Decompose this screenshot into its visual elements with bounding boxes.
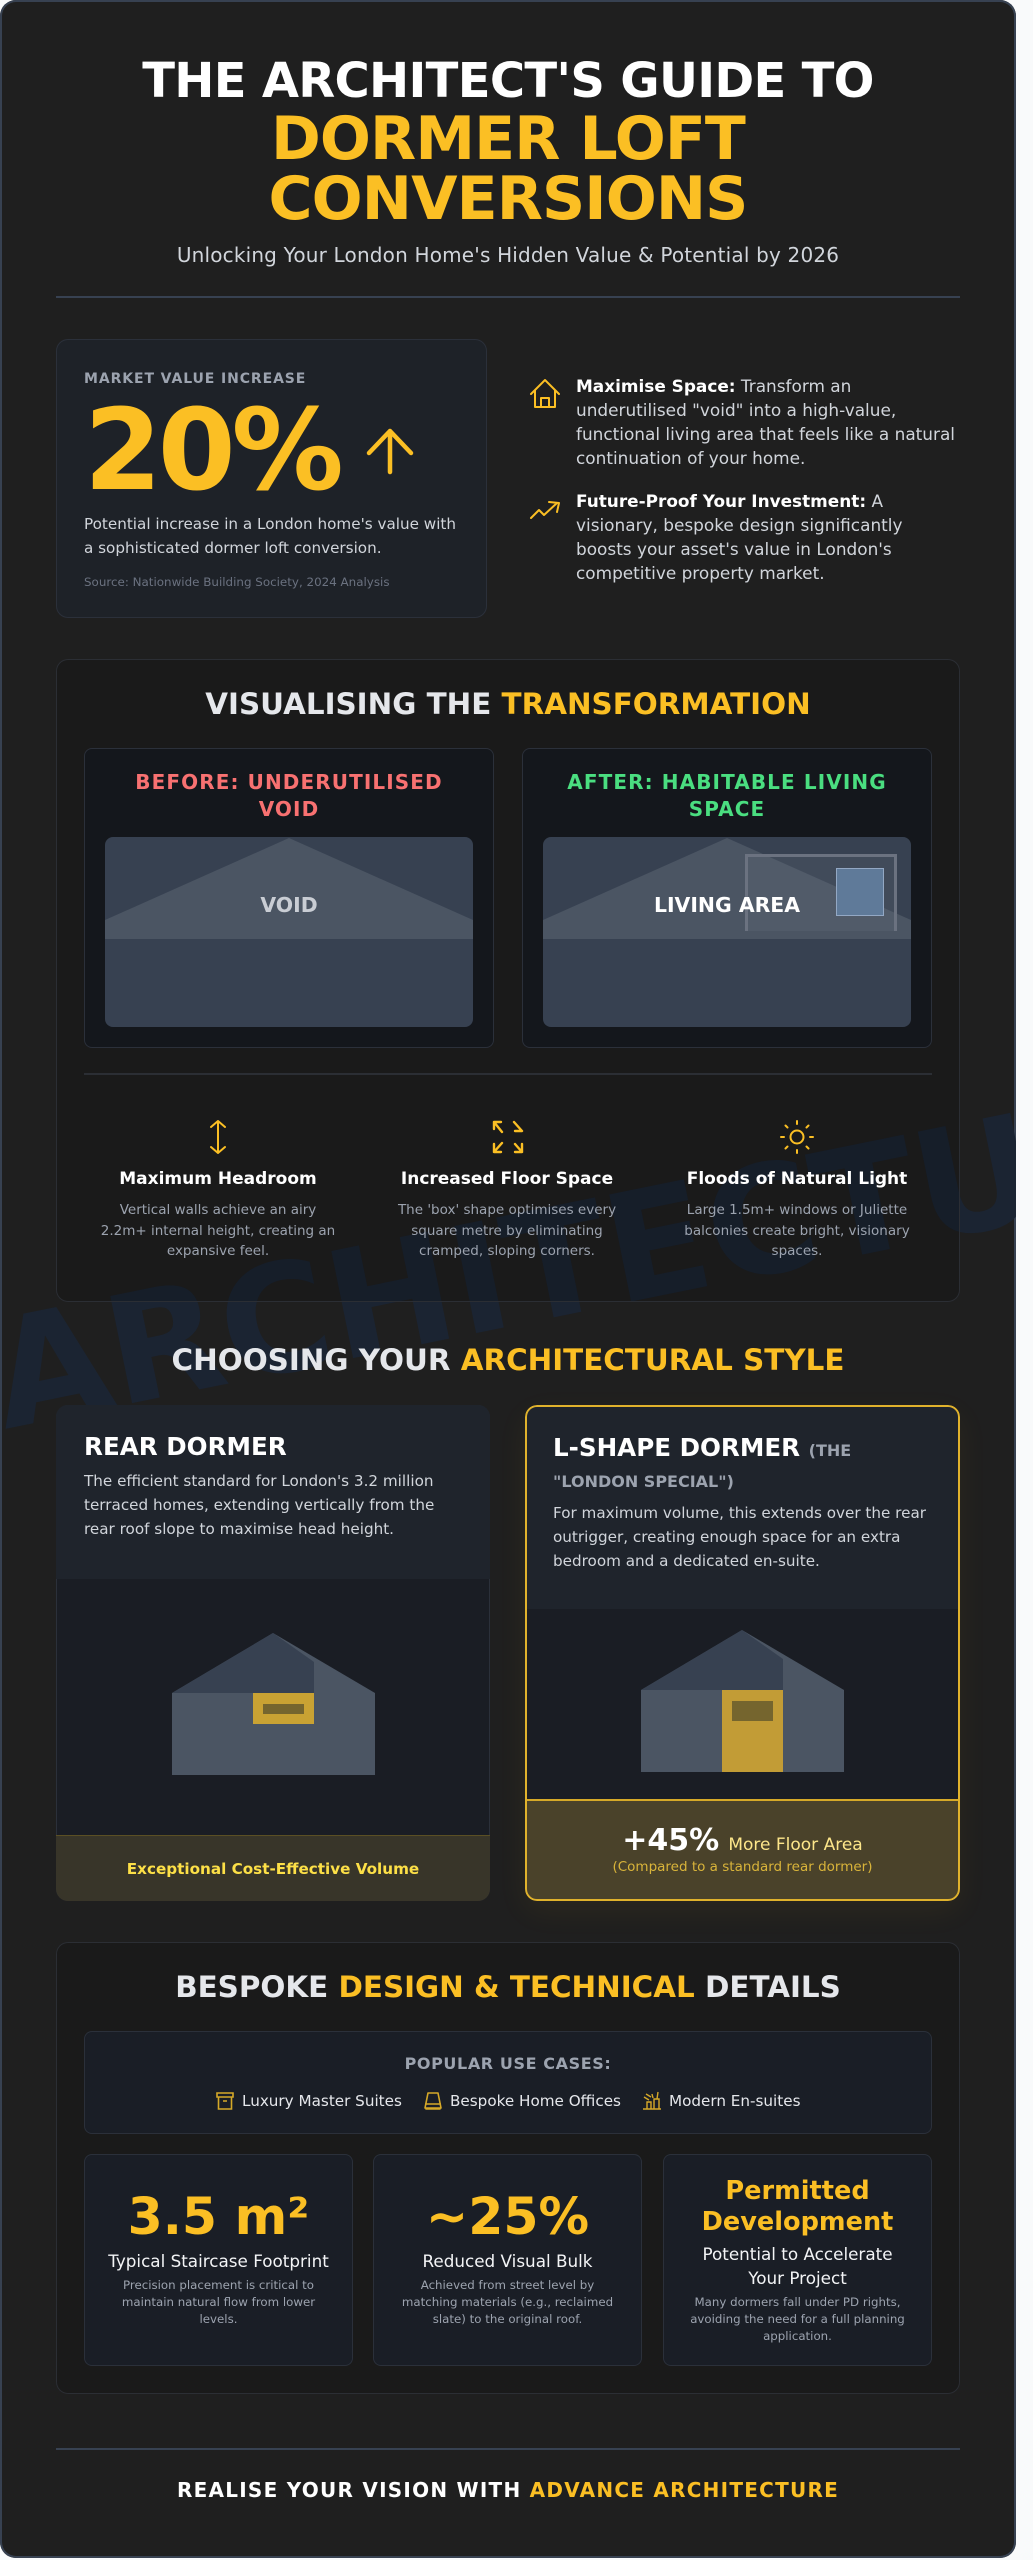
title: REAR DORMER xyxy=(84,1432,287,1461)
title: THE ARCHITECT'S GUIDE TO xyxy=(142,53,874,109)
text: outrigger, creating enough space for an extra xyxy=(553,1528,900,1546)
text xyxy=(84,1472,434,1538)
panel: popular use cases xyxy=(84,2031,932,2134)
stat value: 20% xyxy=(84,386,339,516)
benefit text: underutilised "void" into a high-value, xyxy=(576,400,896,420)
feature: headroom xyxy=(101,1120,335,1259)
title highlight xyxy=(269,104,747,234)
stat card: permitted development xyxy=(663,2154,932,2366)
title note: "LONDON SPECIAL") xyxy=(553,1472,734,1491)
description: Many dormers fall under PD rights, xyxy=(694,2295,900,2309)
panel: visualising the transformation xyxy=(56,659,960,1302)
text xyxy=(553,1504,926,1570)
label: Bespoke Home Offices xyxy=(450,2092,621,2110)
text: terraced homes, extending vertically from the xyxy=(84,1496,434,1514)
icon: house xyxy=(530,379,560,408)
panel: l-shape dormer xyxy=(525,1405,960,1901)
text: The efficient standard for London's 3.2 million xyxy=(84,1472,433,1490)
feature text: square metre by eliminating xyxy=(411,1222,603,1238)
title: L-SHAPE DORMER (THE xyxy=(553,1433,851,1462)
use cases heading: POPULAR USE CASES: xyxy=(405,2054,611,2073)
description: avoiding the need for a full planning xyxy=(690,2312,905,2326)
text: bedroom and a dedicated en-suite. xyxy=(553,1552,820,1570)
description: Precision placement is critical to xyxy=(123,2278,314,2292)
callout xyxy=(56,1835,490,1901)
benefit text: visionary, bespoke design significantly xyxy=(576,515,902,535)
stat source: Source: Nationwide Building Society, 2024 Analysis xyxy=(84,575,390,589)
feature text: cramped, sloping corners. xyxy=(419,1243,595,1259)
panel: after xyxy=(522,748,932,1048)
icon: sun xyxy=(780,1120,814,1154)
stat card: visual bulk xyxy=(373,2154,642,2366)
stat: +45% More Floor Area xyxy=(622,1823,863,1858)
stat description: Potential increase in a London home's value with xyxy=(84,515,456,533)
description: Achieved from street level by xyxy=(421,2278,594,2292)
value: Development xyxy=(702,2207,893,2237)
icon: trend arrow xyxy=(530,501,560,519)
label: Typical Staircase Footprint xyxy=(108,2251,329,2271)
after heading xyxy=(567,770,887,821)
benefit text xyxy=(576,376,955,468)
panel: rear dormer xyxy=(56,1405,490,1901)
feature text: 2.2m+ internal height, creating an xyxy=(101,1222,335,1238)
description block xyxy=(525,1405,960,1609)
before heading: VOID xyxy=(259,797,319,821)
benefit text: continuation of your home. xyxy=(576,448,805,468)
feature text: Vertical walls achieve an airy xyxy=(120,1202,316,1218)
feature text xyxy=(101,1202,335,1259)
text: rear roof slope to maximise head height. xyxy=(84,1520,394,1538)
benefit text: competitive property market. xyxy=(576,563,825,583)
description xyxy=(663,2294,932,2345)
note: (Compared to a standard rear dormer) xyxy=(612,1859,873,1875)
before heading xyxy=(135,770,443,821)
after heading: AFTER: HABITABLE LIVING xyxy=(567,770,887,794)
feature text: balconies create bright, visionary xyxy=(684,1222,910,1238)
panel: before xyxy=(84,748,494,1048)
panel: bespoke design and technical details xyxy=(56,1942,960,2394)
label: LIVING AREA xyxy=(654,893,800,917)
benefit text: Future-Proof Your Investment: A xyxy=(576,491,883,511)
feature text: The 'box' shape optimises every xyxy=(398,1202,616,1218)
feature: natural light xyxy=(684,1120,910,1259)
illustration: rear dormer house xyxy=(172,1633,375,1775)
feature text: Large 1.5m+ windows or Juliette xyxy=(687,1202,907,1218)
before heading: BEFORE: UNDERUTILISED xyxy=(135,770,443,794)
label: Luxury Master Suites xyxy=(242,2092,402,2110)
label: Potential to Accelerate xyxy=(702,2244,893,2264)
description xyxy=(122,2278,316,2326)
value: 3.5 m² xyxy=(128,2187,309,2246)
benefit text: Maximise Space: Transform an xyxy=(576,376,851,396)
stat label: MARKET VALUE INCREASE xyxy=(84,371,306,387)
icon: vertical arrows xyxy=(210,1120,226,1154)
section heading: architectural style: CHOOSING YOUR ARCHITECTURAL STYLE xyxy=(172,1343,844,1377)
description: maintain natural flow from lower xyxy=(122,2295,315,2309)
icon: archive box xyxy=(216,2092,234,2110)
feature text xyxy=(684,1202,910,1259)
title highlight: DORMER LOFT xyxy=(271,104,745,174)
icon: chair xyxy=(424,2092,442,2110)
icon: up arrow xyxy=(366,428,414,474)
callout: Exceptional Cost-Effective Volume xyxy=(127,1860,419,1878)
after heading: SPACE xyxy=(689,797,765,821)
value: ~25% xyxy=(426,2187,589,2246)
card highlight border xyxy=(525,1405,960,1901)
benefit text: functional living area that feels like a natural xyxy=(576,424,955,444)
dormer outline xyxy=(745,854,897,931)
benefit text: boosts your asset's value in London's xyxy=(576,539,892,559)
use case: modern en-suites xyxy=(643,2092,800,2110)
feature title: Floods of Natural Light xyxy=(687,1169,907,1189)
label: Reduced Visual Bulk xyxy=(422,2251,593,2271)
label: VOID xyxy=(260,893,318,917)
description block xyxy=(56,1405,490,1579)
feature: floor space xyxy=(398,1120,616,1259)
title highlight: CONVERSIONS xyxy=(269,164,747,234)
description: slate) to the original roof. xyxy=(433,2312,582,2326)
stat description: a sophisticated dormer loft conversion. xyxy=(84,539,382,557)
description xyxy=(402,2278,613,2326)
label: Modern En-suites xyxy=(669,2092,800,2110)
benefit text xyxy=(576,491,902,583)
feature text xyxy=(398,1202,616,1259)
benefit: future-proof xyxy=(530,491,902,583)
feature title: Maximum Headroom xyxy=(119,1169,317,1189)
icon: expand xyxy=(492,1120,524,1154)
illustration: living area xyxy=(543,837,911,1027)
illustration: void xyxy=(105,837,473,1027)
feature text: spaces. xyxy=(772,1243,822,1259)
footer: REALISE YOUR VISION WITH ADVANCE ARCHITECTURE xyxy=(177,2478,839,2502)
label xyxy=(702,2244,893,2288)
feature title: Increased Floor Space xyxy=(401,1169,613,1189)
window xyxy=(836,868,884,916)
panel: market value stat xyxy=(56,339,487,618)
benefit: maximise space xyxy=(530,376,955,468)
use case: bespoke home offices xyxy=(424,2092,621,2110)
value xyxy=(702,2176,893,2237)
header xyxy=(142,53,874,267)
stat card: staircase xyxy=(84,2154,353,2366)
heading: BESPOKE DESIGN & TECHNICAL DETAILS xyxy=(175,1970,841,2004)
label: Your Project xyxy=(748,2268,847,2288)
description: matching materials (e.g., reclaimed xyxy=(402,2295,613,2309)
icon: shower xyxy=(643,2092,661,2110)
feature text: expansive feel. xyxy=(167,1243,269,1259)
description: application. xyxy=(763,2329,832,2343)
value: Permitted xyxy=(725,2176,870,2206)
use case: luxury master suites xyxy=(216,2092,402,2110)
callout xyxy=(525,1799,960,1901)
illustration: l-shape house xyxy=(641,1630,844,1772)
text: For maximum volume, this extends over the rear xyxy=(553,1504,926,1522)
subtitle: Unlocking Your London Home's Hidden Value & Potential by 2026 xyxy=(177,243,839,267)
heading: VISUALISING THE TRANSFORMATION xyxy=(205,687,811,721)
description: levels. xyxy=(200,2312,237,2326)
stat description xyxy=(84,515,456,557)
